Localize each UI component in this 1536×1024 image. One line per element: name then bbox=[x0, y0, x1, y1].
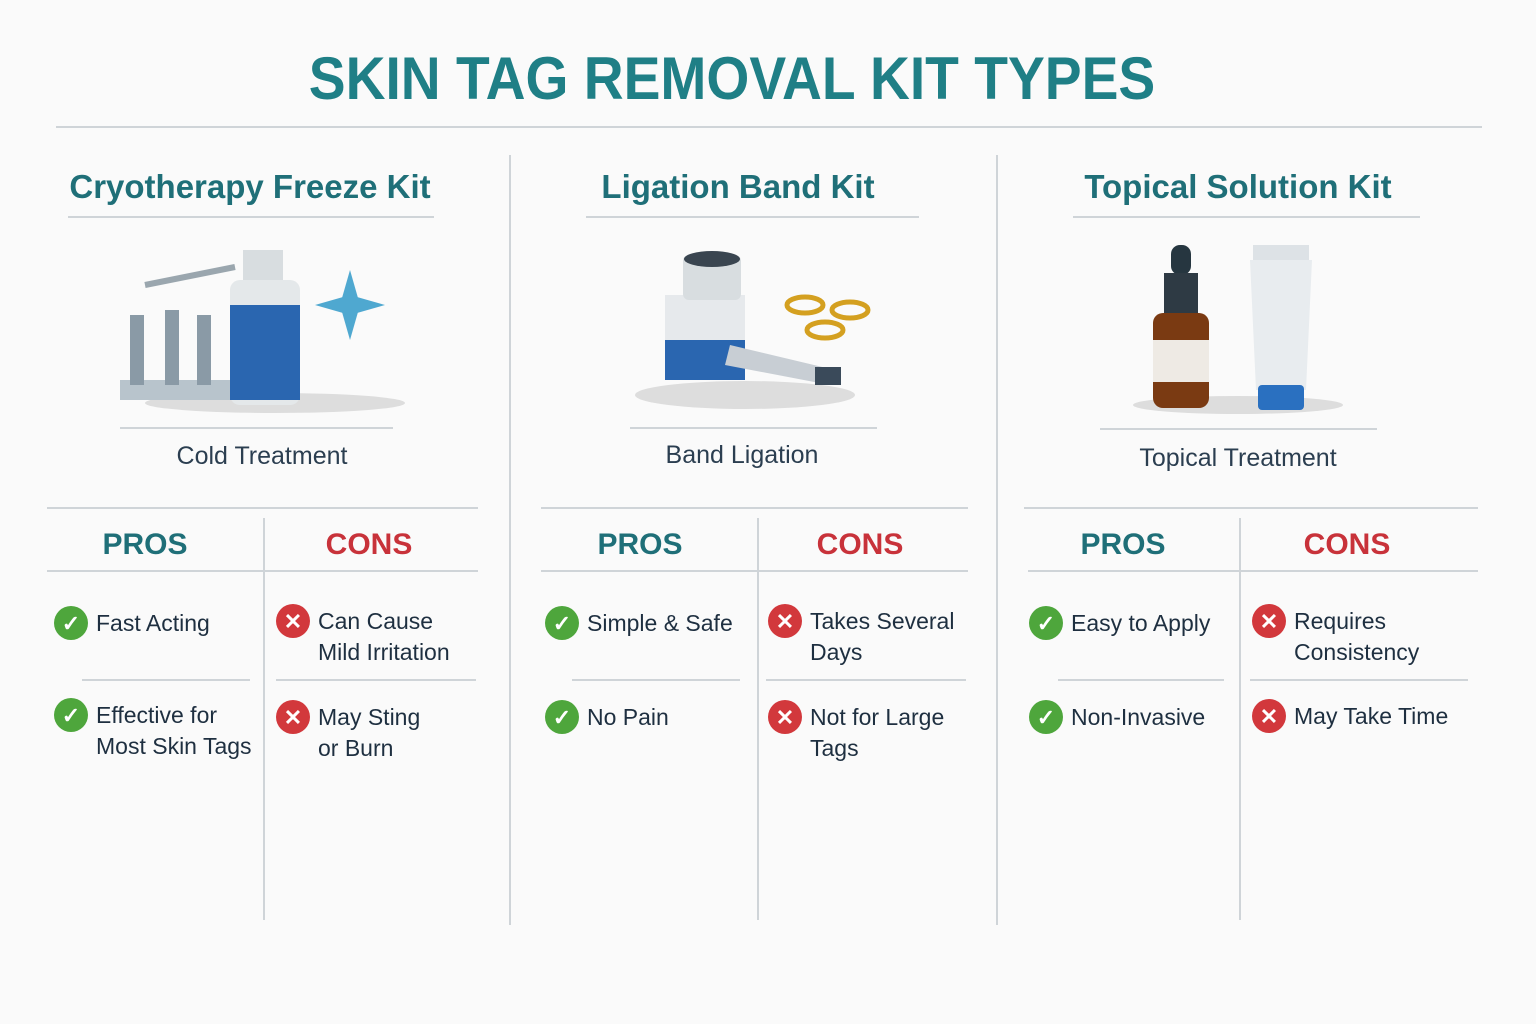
panel: ligation bbox=[541, 168, 968, 920]
cons items: ✕ bbox=[284, 608, 302, 634]
cons items: Days bbox=[810, 639, 862, 665]
cons items: Mild Irritation bbox=[318, 639, 450, 665]
pros items bbox=[1029, 606, 1210, 640]
panel: cryotherapy: ✓ bbox=[62, 702, 80, 728]
pros items: ✓ bbox=[1037, 610, 1055, 636]
heading: Cryotherapy Freeze Kit bbox=[69, 168, 431, 205]
panel: topical: ✕ bbox=[1260, 704, 1278, 728]
subtitle: Topical Treatment bbox=[1139, 444, 1337, 472]
pros items bbox=[545, 606, 733, 640]
panel: ligation: ✓ bbox=[553, 704, 571, 730]
panel: cryotherapy: or Burn bbox=[318, 735, 393, 761]
panel: ligation: Not for Large bbox=[810, 704, 944, 730]
pros items: Simple & Safe bbox=[587, 610, 733, 636]
panel: topical: Non-Invasive bbox=[1071, 704, 1205, 730]
cons items: ✕ bbox=[1260, 608, 1278, 634]
panel: ligation: Tags bbox=[810, 735, 859, 761]
pros header: PROS bbox=[1080, 528, 1166, 561]
subtitle: Band Ligation bbox=[666, 441, 818, 469]
heading: Topical Solution Kit bbox=[1084, 168, 1392, 205]
cons items bbox=[1252, 604, 1420, 665]
cons items: Takes Several bbox=[810, 608, 954, 634]
heading: Ligation Band Kit bbox=[601, 168, 875, 205]
panel: topical bbox=[1024, 168, 1478, 920]
icon: freeze spray bbox=[120, 250, 405, 413]
cons items bbox=[768, 604, 954, 665]
panel: cryotherapy: Effective for bbox=[96, 702, 217, 728]
cons header: CONS bbox=[326, 528, 412, 561]
cons header: CONS bbox=[817, 528, 903, 561]
cons items: Can Cause bbox=[318, 608, 433, 634]
panel: topical: May Take Time bbox=[1294, 703, 1448, 729]
cons items bbox=[276, 604, 450, 665]
cons header: CONS bbox=[1304, 528, 1390, 561]
pros header: PROS bbox=[102, 528, 188, 561]
cons items: ✕ bbox=[776, 608, 794, 634]
cons items: Consistency bbox=[1294, 639, 1419, 665]
panel: ligation: ✕ bbox=[776, 704, 794, 730]
icon: dropper bottle and tube bbox=[1133, 245, 1343, 414]
pros items: ✓ bbox=[553, 610, 571, 636]
cons items: Requires bbox=[1294, 608, 1386, 634]
pros items: Easy to Apply bbox=[1071, 610, 1210, 636]
panel: cryotherapy: ✕ bbox=[284, 704, 302, 730]
panel: cryotherapy: Most Skin Tags bbox=[96, 733, 252, 759]
pros items bbox=[54, 606, 210, 640]
subtitle: Cold Treatment bbox=[177, 442, 347, 470]
pros items: Fast Acting bbox=[96, 610, 210, 636]
icon: ligation device bbox=[635, 251, 870, 409]
panel: cryotherapy: May Sting bbox=[318, 704, 420, 730]
pros header: PROS bbox=[597, 528, 683, 561]
panel: ligation: No Pain bbox=[587, 704, 669, 730]
panel: cryotherapy bbox=[47, 168, 478, 920]
panel: topical: ✓ bbox=[1037, 704, 1055, 730]
pros items: ✓ bbox=[62, 610, 80, 636]
title: SKIN TAG REMOVAL KIT TYPES bbox=[309, 45, 1155, 112]
